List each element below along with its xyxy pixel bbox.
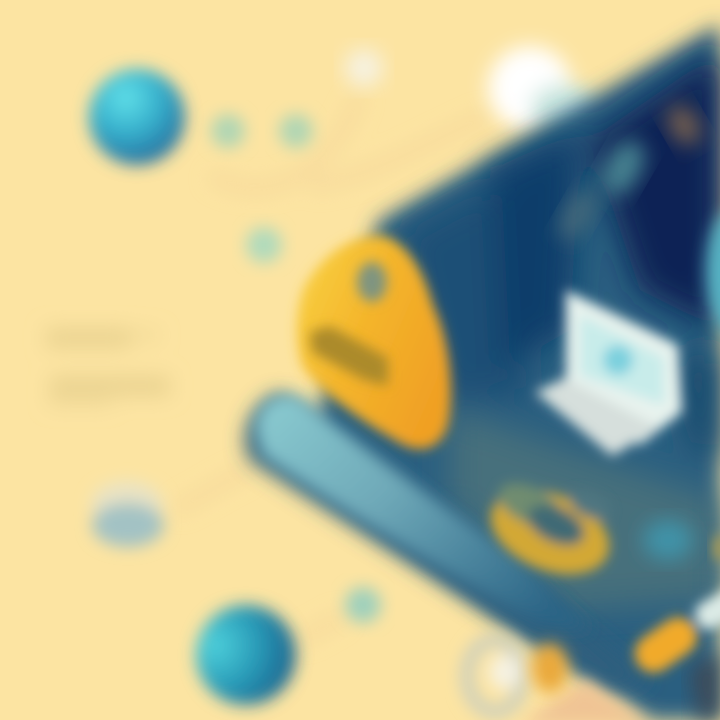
padlock <box>297 236 451 449</box>
white blob: large <box>488 46 599 132</box>
panel accent: lower teal <box>552 184 604 246</box>
small dot: bottom <box>345 587 381 623</box>
dark corner: right edge <box>690 650 720 720</box>
small dot: middle <box>246 227 282 263</box>
connector lines <box>175 95 490 640</box>
text placeholder block <box>46 328 170 406</box>
panel accent: upper teal <box>592 133 654 203</box>
white blob: small <box>345 49 383 87</box>
platform <box>245 393 650 690</box>
orange accent: right edge <box>713 534 720 562</box>
laptop <box>535 290 682 456</box>
small dot: top two <box>279 114 313 148</box>
teal disc: right edge <box>706 210 720 334</box>
yellow ring <box>478 474 622 590</box>
teal accent <box>643 520 693 560</box>
sphere: top left <box>89 69 185 165</box>
peach corner: bottom <box>520 680 650 720</box>
orange marker: bottom <box>532 643 568 693</box>
lock slot <box>310 326 388 386</box>
orange pill <box>627 582 720 680</box>
keyhole <box>357 262 387 302</box>
panel shading <box>400 50 720 610</box>
gray ring: bottom <box>467 640 523 712</box>
dark panel <box>300 24 720 720</box>
panel accent: brown <box>660 98 708 152</box>
sphere: bottom <box>196 605 296 705</box>
gray blob <box>91 481 164 547</box>
small dot: top one <box>211 114 245 148</box>
